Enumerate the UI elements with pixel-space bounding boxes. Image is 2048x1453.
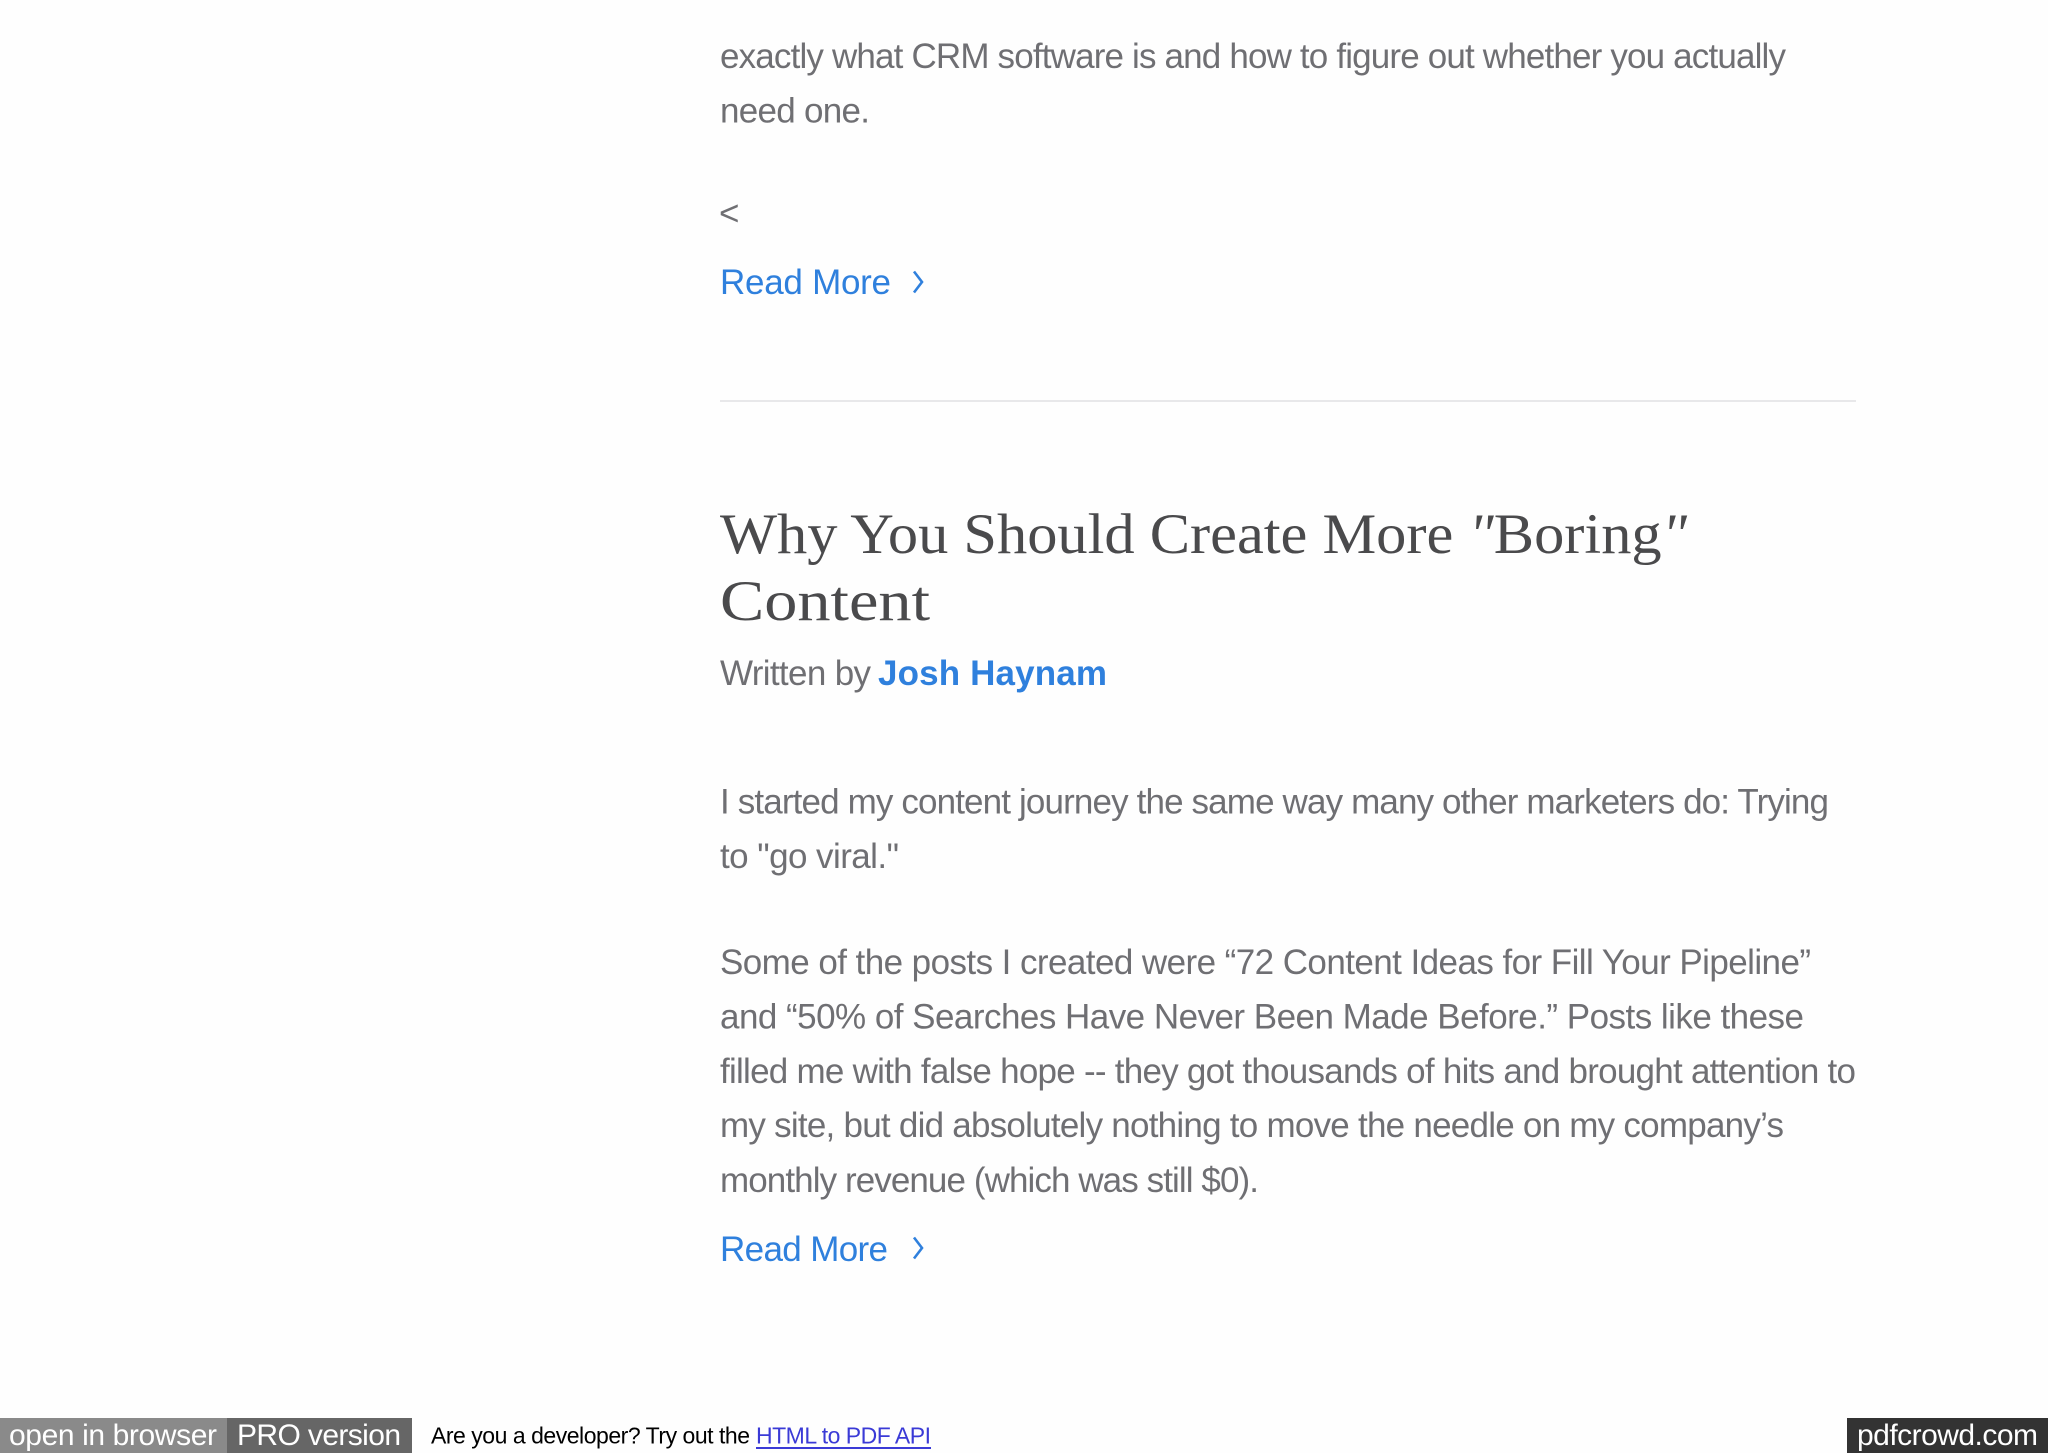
- footer button: PRO version: PRO version: [237, 1419, 401, 1452]
- text block: second paragraph: and “50% of Searches Have Never Been Made Before.” Posts like these: [720, 998, 1804, 1036]
- text block: second paragraph: monthly revenue (which was still $0).: [720, 1161, 1259, 1200]
- footer text: developer prompt and link: Are you a developer? Try out the: [431, 1422, 750, 1448]
- text block: second paragraph: Some of the posts I created were “72 Content Ideas for Fill Your Pipeline”: [720, 943, 1811, 982]
- link: read more (first): Read More: [720, 263, 891, 302]
- text block: second paragraph: [720, 943, 1856, 1200]
- heading: article title: [720, 503, 1688, 633]
- byline: [720, 654, 1107, 693]
- byline: Josh Haynam: [878, 654, 1107, 693]
- footer badge: pdfcrowd.com: pdfcrowd.com: [1857, 1419, 2038, 1452]
- text block: second paragraph: filled me with false hope -- they got thousands of hits and brought attention to: [720, 1052, 1856, 1091]
- footer text: developer prompt and link: HTML to PDF API: [756, 1422, 931, 1448]
- text block: first paragraph: I started my content journey the same way many other marketers do: Trying: [720, 782, 1829, 822]
- heading: article title: Why You Should Create More "Boring": [720, 503, 1688, 566]
- text block: first paragraph: [720, 782, 1829, 876]
- heading: article title: Content: [720, 570, 930, 633]
- text block: previous post excerpt: <: [719, 194, 739, 233]
- text block: previous post excerpt: need one.: [720, 92, 870, 130]
- footer text: developer prompt and link: [431, 1422, 931, 1449]
- link: read more (second): Read More: [720, 1230, 888, 1269]
- text block: first paragraph: to "go viral.": [720, 837, 899, 876]
- text block: previous post excerpt: [719, 37, 1786, 233]
- text block: second paragraph: my site, but did absolutely nothing to move the needle on my company’s: [720, 1106, 1784, 1145]
- footer button: open in browser: open in browser: [9, 1419, 217, 1452]
- text block: previous post excerpt: exactly what CRM software is and how to figure out whether you actually: [720, 37, 1786, 76]
- byline: Written by: [720, 654, 872, 693]
